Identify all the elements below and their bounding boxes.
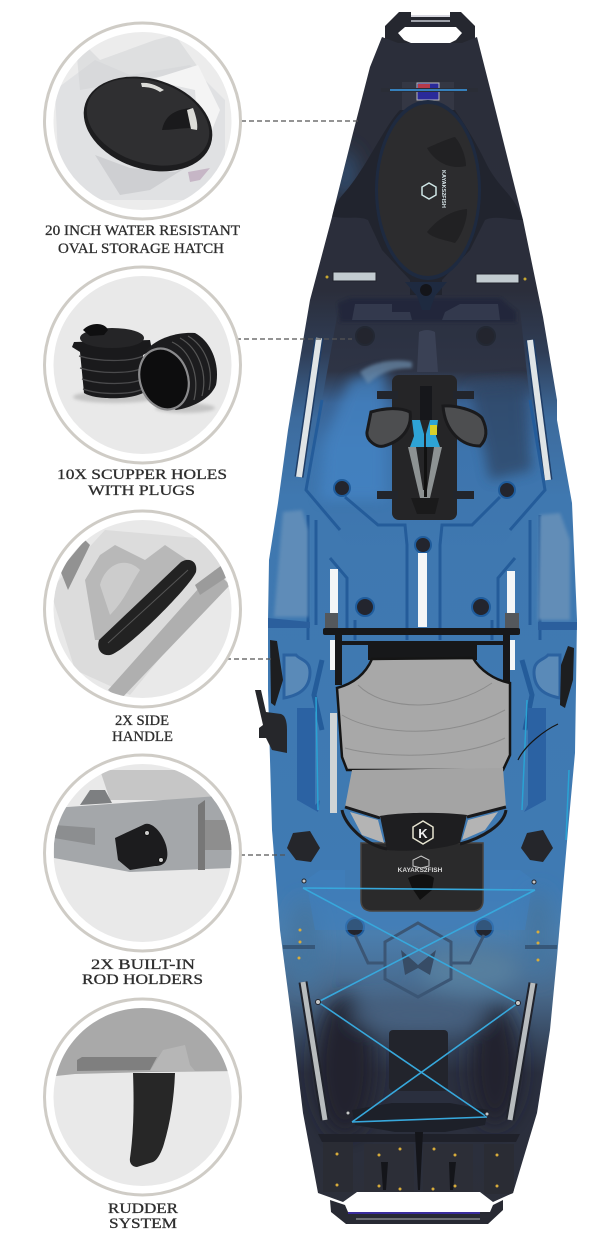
panel: scupper plugs [44,267,240,463]
drain hole [420,284,432,296]
flag plate [402,82,454,110]
front drain [406,282,446,298]
foot pedals [367,406,486,446]
rear hatch pad: KAYAKS2FISH [398,867,443,874]
paddle clip [255,690,287,753]
label: hatch: OVAL STORAGE HATCH [58,241,224,257]
label: rudder: SYSTEM [109,1216,177,1232]
seat front: K [418,826,428,841]
cable [518,724,558,760]
leader line: hatch [233,120,358,122]
side handle recesses [284,655,560,698]
panel: rod holders [44,755,240,951]
rear tank well [310,894,530,998]
rod holders [287,830,553,862]
panel: oval storage hatch [44,23,240,219]
rear plate [389,1030,448,1091]
colour blotches [291,150,550,1135]
stern deck panels [298,928,540,1194]
side shoulders [283,945,557,949]
pedal plate [377,375,474,520]
rear hatch pad [361,843,483,911]
bow handle bars [411,15,450,22]
deck rails top [326,272,526,283]
leader line: rod holders [232,854,288,856]
side handles [270,640,574,708]
stern bungee [303,888,535,1122]
oval hatch: KAYAKS2FISH [440,170,446,208]
hull details clipped to outline [268,82,578,1194]
label: side handle: 2X SIDE [115,713,169,729]
oval hatch [375,100,481,280]
panel: side handle [44,511,240,707]
gunwale rails mid [299,338,548,480]
label: scupper holes: 10X SCUPPER HOLES [57,467,227,483]
bungee eyelets [302,879,536,1116]
seat cushion [345,768,506,818]
label: scupper holes: WITH PLUGS [88,483,195,499]
label: rod holders: ROD HOLDERS [82,972,203,988]
bow bungee [390,88,467,92]
kayak top view [255,12,578,1224]
bow carry handle [385,12,475,46]
seat frame [323,613,520,685]
label: rudder: RUDDER [108,1201,178,1217]
hull [268,37,577,1202]
pedal post [420,386,432,420]
seat front [342,807,506,851]
seat back [337,658,510,770]
panel: rudder system [40,999,240,1195]
seat seams [342,683,505,755]
rear well bottom [352,1103,488,1132]
label: hatch: 20 INCH WATER RESISTANT [45,223,240,239]
side panels [268,510,578,630]
deck white rails [330,553,515,813]
forward deck recess around hatch [330,110,523,295]
label: side handle: HANDLE [112,729,173,745]
stern handle [330,1200,503,1224]
cockpit well [314,298,536,498]
side recesses lower [297,708,546,812]
scupper holes [334,327,515,937]
blue rods beside seat [316,697,569,840]
leader line: side handle [218,658,272,660]
deck channels [306,400,545,730]
label: rod holders: 2X BUILT-IN [91,957,195,973]
leader line: scupper holes [228,338,352,340]
rear rails [303,982,533,1120]
